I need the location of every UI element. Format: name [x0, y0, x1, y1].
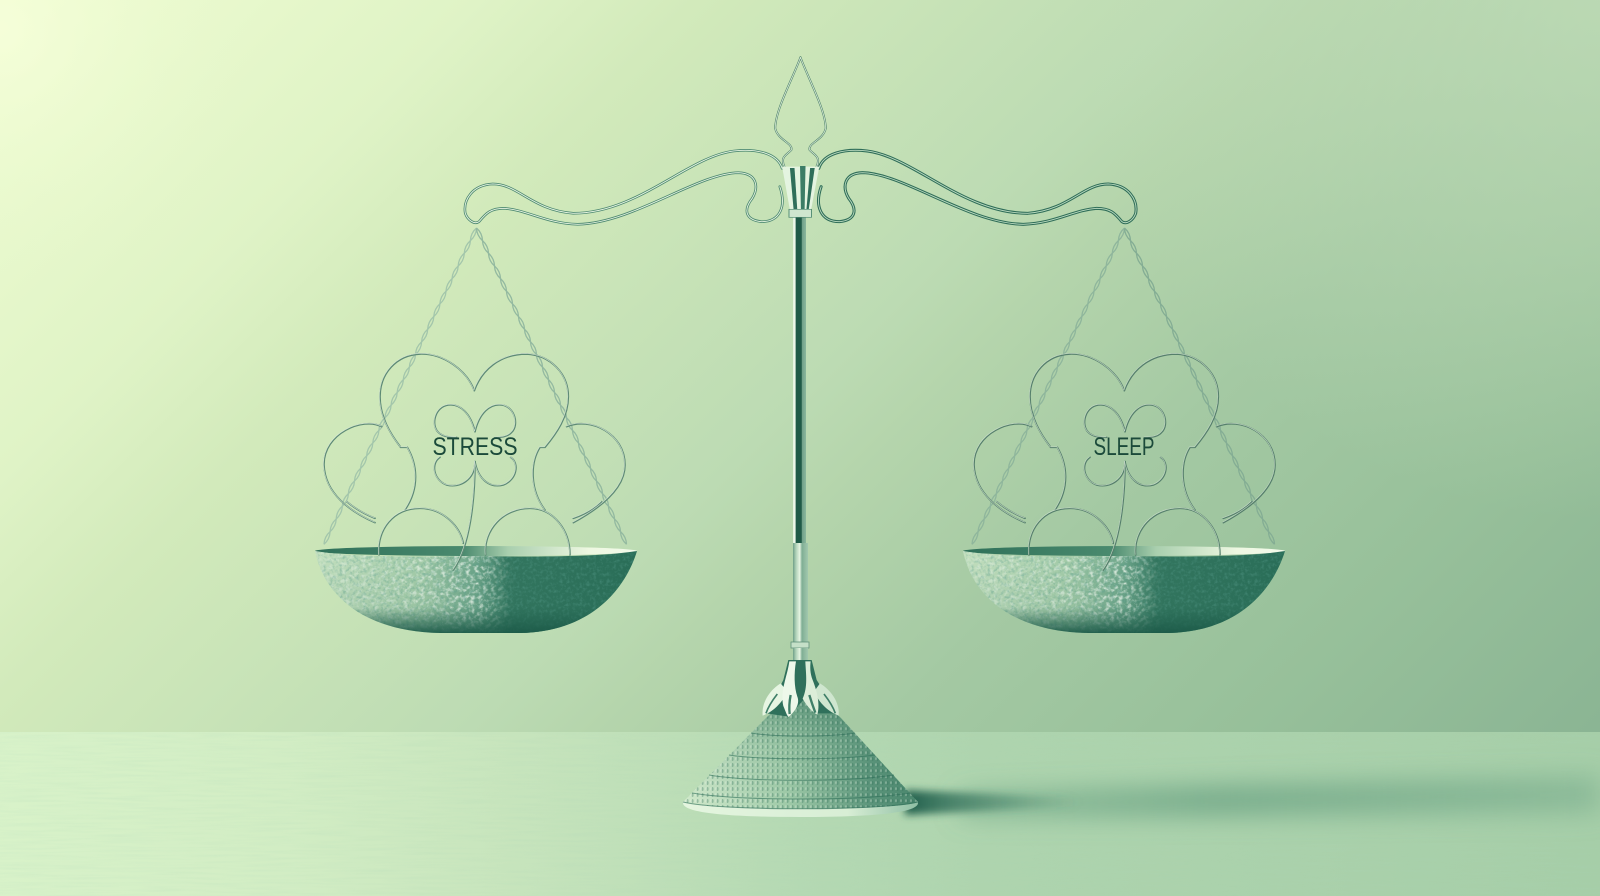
- left clover wire: [323, 353, 625, 570]
- right beam arm: [819, 150, 1136, 224]
- right clover wire: [973, 353, 1275, 570]
- left pan: stress: [315, 228, 637, 633]
- right bowl: [963, 546, 1285, 633]
- left beam arm: [465, 150, 782, 224]
- right pan: sleep: [963, 228, 1285, 633]
- label: stress: STRESS: [432, 433, 518, 461]
- label: sleep: SLEEP: [1094, 433, 1154, 461]
- left chains: [324, 228, 626, 544]
- right chains: [972, 228, 1274, 544]
- spear finial: [775, 57, 826, 167]
- base foot: [683, 801, 918, 817]
- left bowl: [315, 546, 637, 633]
- weighted base: [683, 660, 918, 817]
- stepped cone: [683, 695, 918, 809]
- petal collar: [763, 660, 839, 717]
- centre bracket: [782, 166, 819, 217]
- table surface: [0, 732, 1600, 896]
- scale beam: [465, 57, 1136, 224]
- central pole: [791, 215, 809, 662]
- base shadow on table: [905, 776, 1600, 816]
